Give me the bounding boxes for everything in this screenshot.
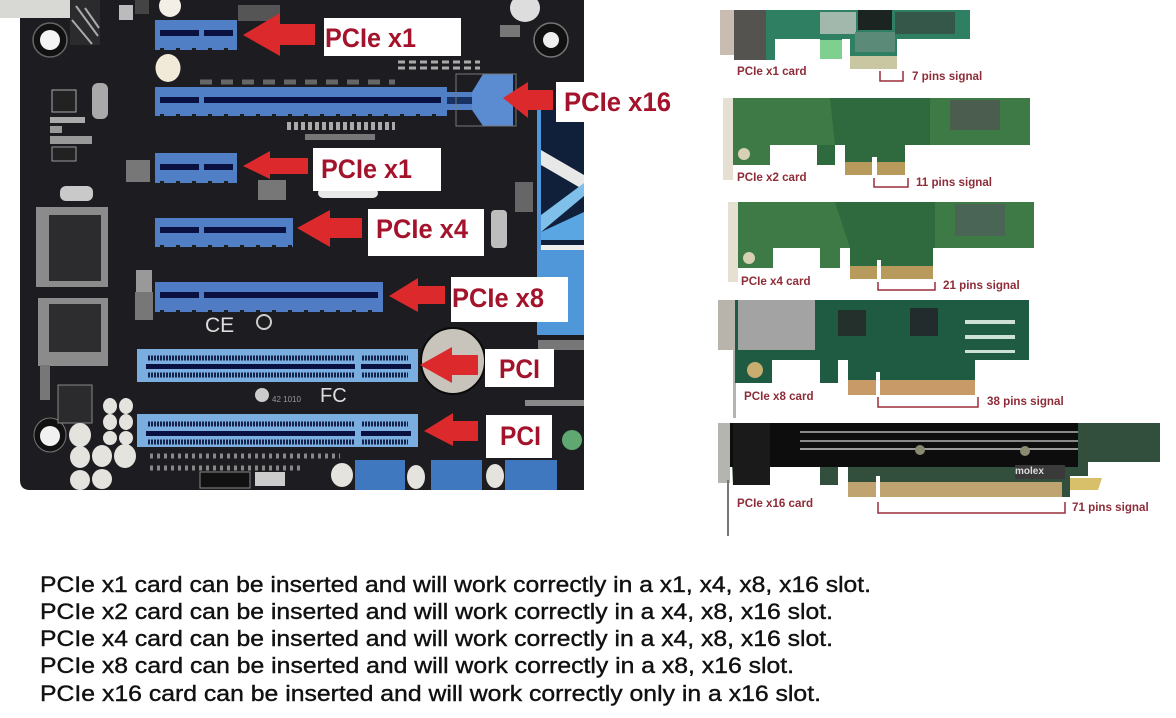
label: PCI upper: PCI xyxy=(499,354,540,384)
motherboard board xyxy=(20,0,584,490)
arrow: PCIe x16 xyxy=(503,82,553,118)
slot: PCI lower xyxy=(137,414,418,447)
label: PCI lower xyxy=(486,415,552,458)
pin bracket xyxy=(878,397,978,407)
label: PCIe x1 top: PCIe x1 xyxy=(325,23,416,53)
text block: compatibility notes: PCIe x8 card can be inserted and will work correctly in a x8, x16 slot. xyxy=(40,653,794,678)
card: PCIe x2 xyxy=(723,98,1030,189)
slot: PCIe x4 xyxy=(155,218,293,247)
slot: PCIe x1 top xyxy=(155,20,237,50)
card: PCIe x1 xyxy=(720,10,982,83)
slot: PCIe x8 xyxy=(155,282,383,312)
arrow: PCI upper xyxy=(420,347,478,383)
label: PCIe x1 second xyxy=(313,148,441,191)
label: PCI lower: PCI xyxy=(500,421,541,451)
pin bracket xyxy=(880,71,903,81)
arrow: PCIe x4 xyxy=(297,210,362,247)
card: PCIe x8 xyxy=(718,300,1064,418)
label: PCIe x4 xyxy=(368,209,484,256)
caption: PCIe x2 card xyxy=(737,171,807,184)
board components xyxy=(0,0,584,488)
arrow: PCIe x1 top xyxy=(243,13,315,56)
slot: PCI upper xyxy=(137,349,418,382)
text block: compatibility notes xyxy=(40,572,871,706)
text block: compatibility notes: PCIe x16 card can be inserted and will work correctly only in a x16 slot. xyxy=(40,681,821,706)
caption: PCIe x8 card xyxy=(744,390,814,403)
text block: compatibility notes: PCIe x2 card can be inserted and will work correctly in a x4, x8, x16 slot. xyxy=(40,599,833,624)
caption: PCIe x16 card xyxy=(737,497,813,510)
card: PCIe x4 xyxy=(728,202,1034,292)
capacitor behind PCI arrow xyxy=(421,328,485,394)
blue connectors xyxy=(355,460,557,490)
caption: PCIe x1 card xyxy=(737,65,807,78)
arrow: PCIe x8 xyxy=(389,278,445,312)
blue heatsink xyxy=(537,110,584,335)
slot: PCIe x16 xyxy=(155,74,516,126)
label: PCIe x1 second: PCIe x1 xyxy=(321,154,412,184)
label: PCIe x1 top xyxy=(324,18,461,56)
card: PCIe x16: molex xyxy=(1015,466,1044,477)
board components: 42 1010 xyxy=(272,395,301,404)
capacitors xyxy=(69,398,504,490)
label: PCIe x16 xyxy=(556,82,672,122)
pin bracket xyxy=(878,282,935,290)
pin count: 11 pins signal xyxy=(916,176,992,189)
pin count: 7 pins signal xyxy=(912,70,982,83)
panel: motherboard photo xyxy=(0,0,584,490)
board components: FC xyxy=(320,385,347,407)
pin bracket xyxy=(878,502,1065,513)
slot: PCIe x1 second xyxy=(155,153,237,183)
arrow: PCIe x1 second xyxy=(243,151,308,179)
board components: CE xyxy=(205,314,234,337)
label: PCIe x4: PCIe x4 xyxy=(376,214,468,244)
text block: compatibility notes: PCIe x4 card can be inserted and will work correctly in a x4, x8, x16 slot. xyxy=(40,626,833,651)
label: PCIe x16: PCIe x16 xyxy=(564,87,671,117)
pin count: 21 pins signal xyxy=(943,279,1020,292)
label: PCI upper xyxy=(485,349,554,387)
label: PCIe x8 xyxy=(451,277,568,322)
pin count: 38 pins signal xyxy=(987,395,1064,408)
caption: PCIe x4 card xyxy=(741,275,811,288)
text block: compatibility notes: PCIe x1 card can be inserted and will work correctly in a x1, x4, x8, x16 slot. xyxy=(40,572,871,597)
arrow: PCI lower xyxy=(424,413,478,446)
pin bracket xyxy=(874,178,908,187)
pin count: 71 pins signal xyxy=(1072,501,1149,514)
label: PCIe x8: PCIe x8 xyxy=(452,283,544,313)
card: PCIe x16 xyxy=(718,423,1160,536)
